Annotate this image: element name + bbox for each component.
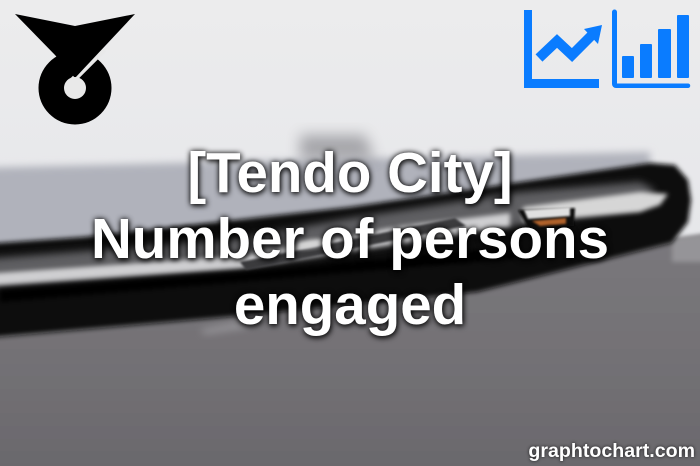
icon: Tendo City emblem [15, 14, 135, 124]
title: Number of persons [91, 207, 609, 270]
icon: rising line chart [524, 10, 602, 88]
title [90, 141, 609, 342]
icon: bar chart [612, 10, 690, 88]
title: engaged [234, 273, 466, 336]
title: [Tendo City] [187, 141, 513, 204]
watermark: site name: graphtochart.com [528, 440, 695, 462]
